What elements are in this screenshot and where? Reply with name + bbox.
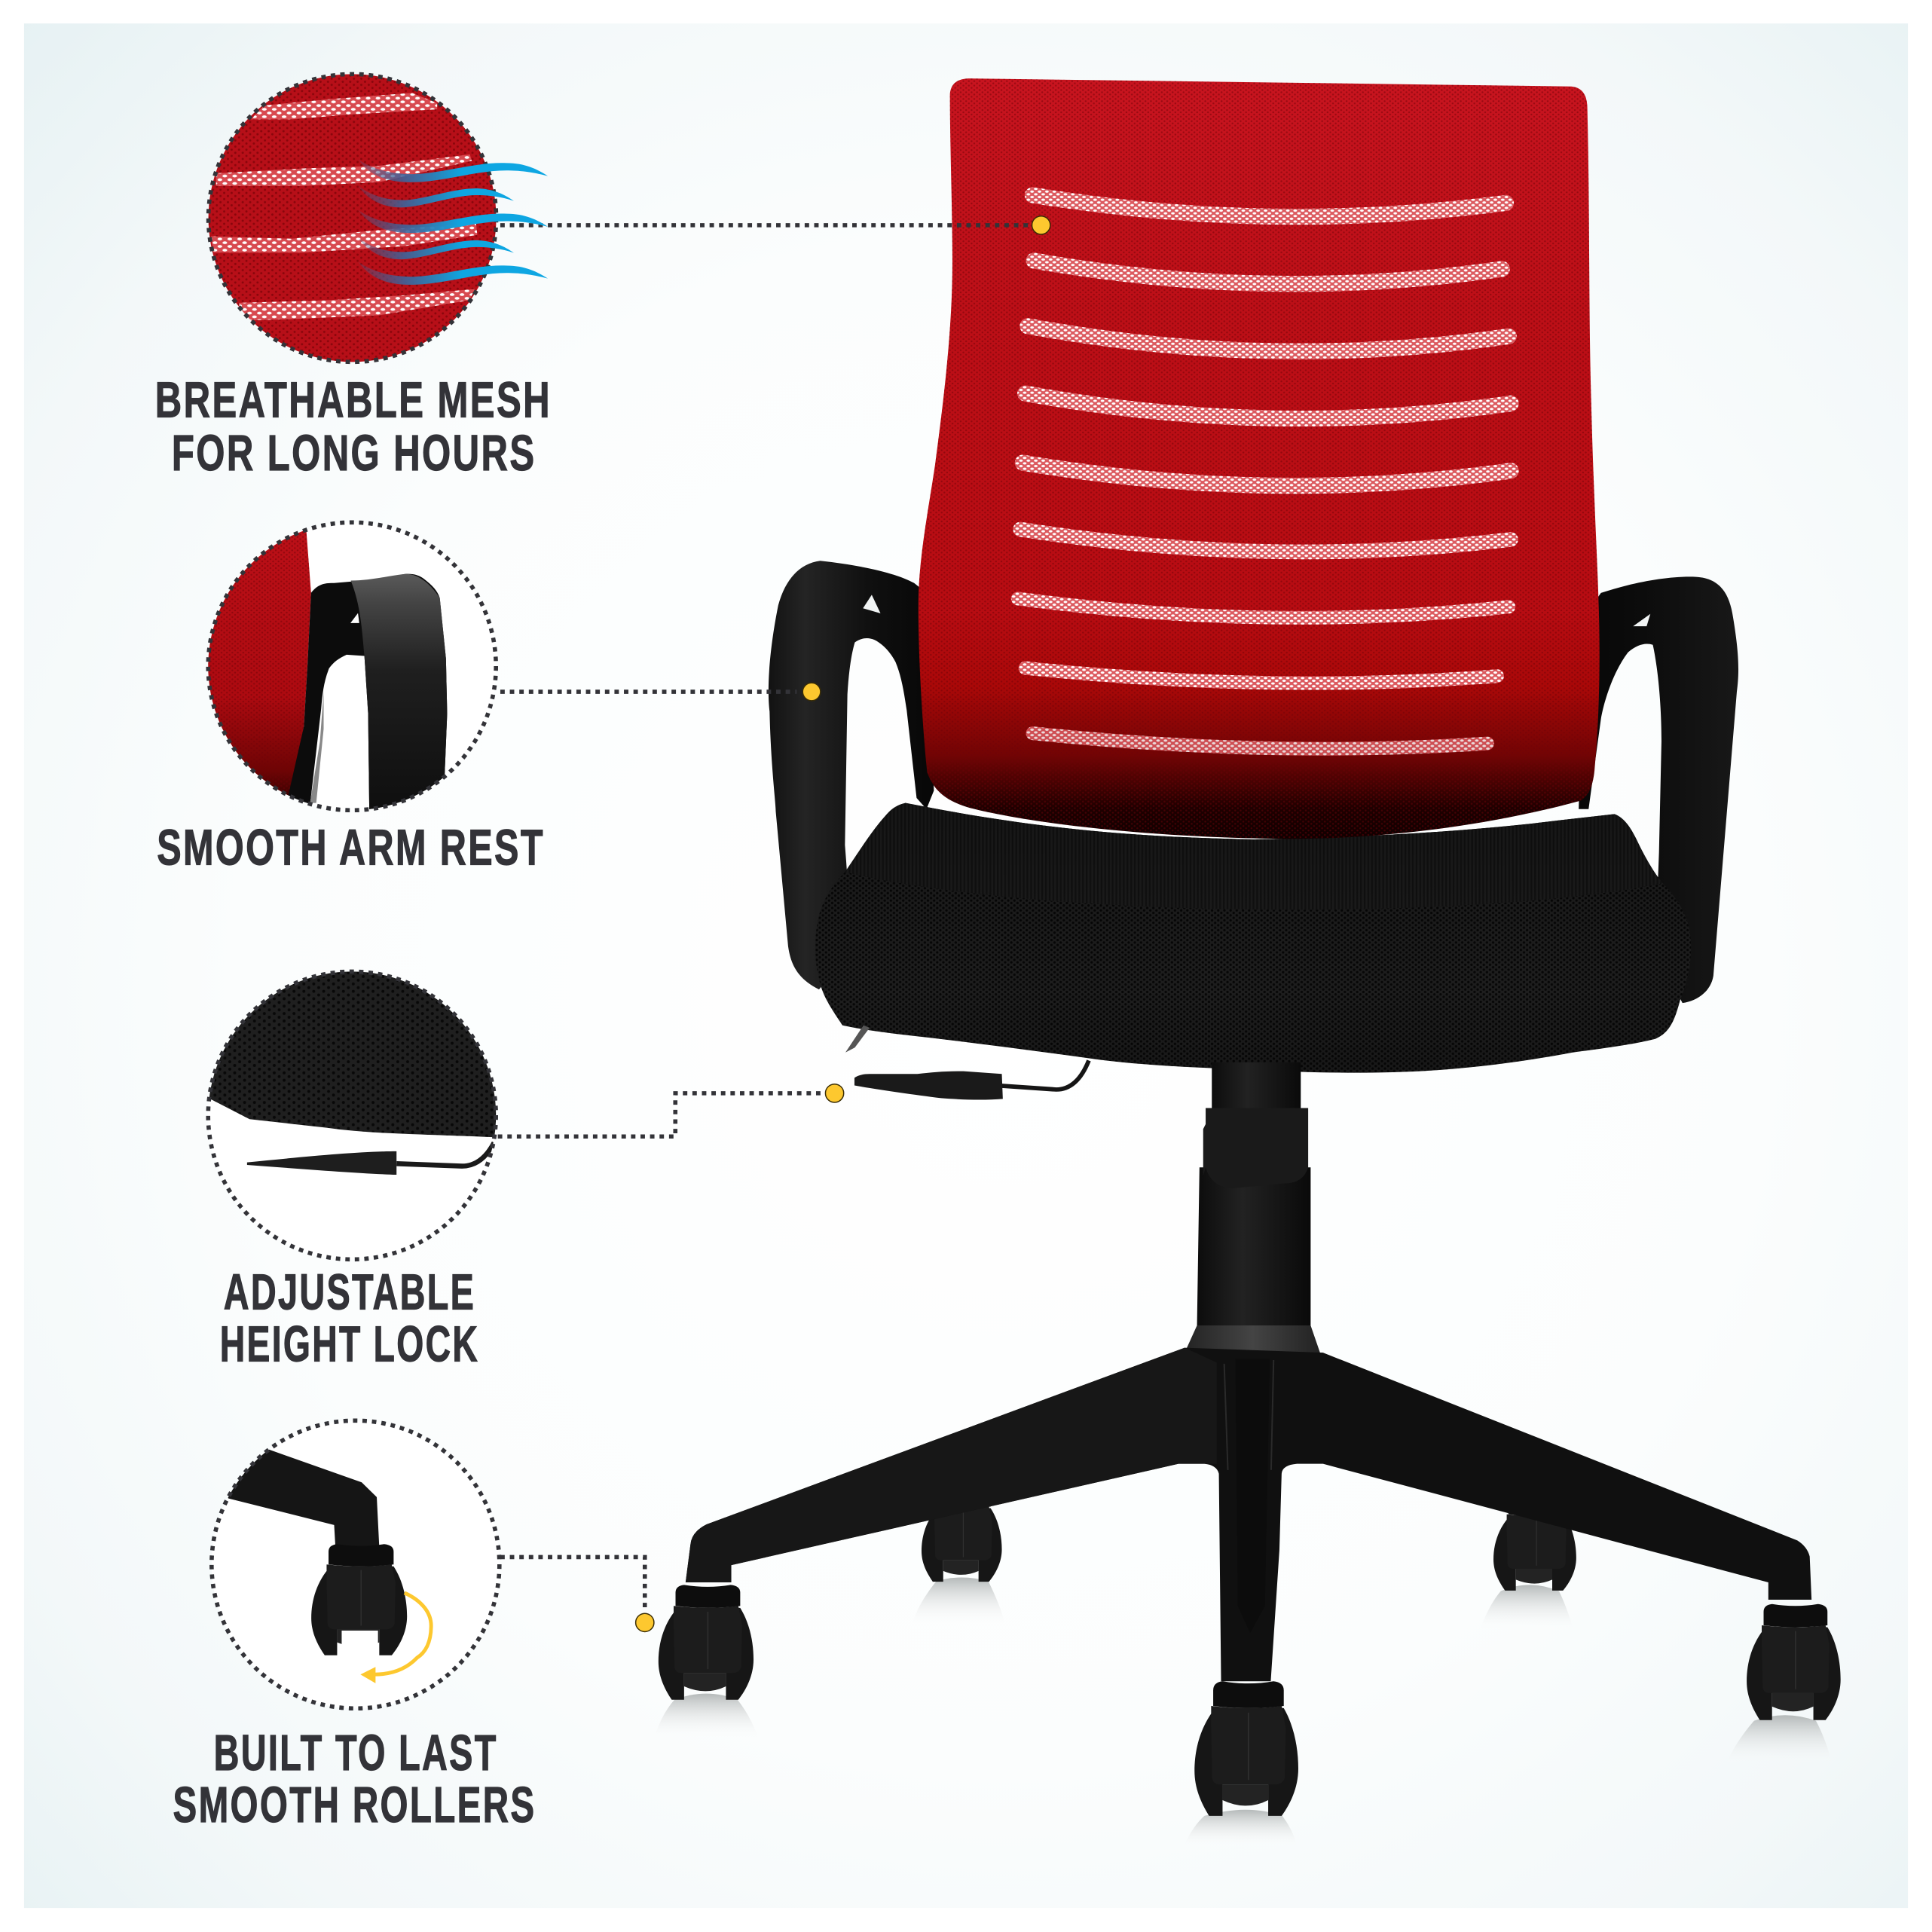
label: smooth arm rest: SMOOTH ARM REST (157, 821, 545, 876)
connector lines (498, 225, 1033, 1612)
label: built to last smooth rollers: BUILT TO LAST (214, 1726, 498, 1781)
feature: breathable mesh (155, 74, 552, 481)
icon: air flow waves (358, 159, 548, 285)
feature: adjustable height lock (197, 964, 506, 1373)
feature: smooth rollers (173, 1420, 536, 1833)
icon: lever close-up circle (197, 964, 506, 1259)
chair product image (659, 78, 1841, 1816)
label: breathable mesh: FOR LONG HOURS (172, 426, 536, 481)
icon: caster close-up circle (212, 1420, 500, 1708)
icon: mesh close-up circle (209, 74, 497, 362)
icon: arm rest close-up circle (197, 519, 496, 815)
caster floor reflections (653, 1577, 1832, 1847)
label: built to last smooth rollers (173, 1726, 536, 1833)
seat cushion (815, 803, 1691, 1073)
label: adjustable height lock: HEIGHT LOCK (220, 1317, 479, 1373)
label: adjustable height lock: ADJUSTABLE (224, 1265, 475, 1321)
label: breathable mesh: BREATHABLE MESH (155, 372, 552, 428)
backrest ventilation stripes (1018, 195, 1511, 749)
rear casters (922, 1490, 1576, 1591)
mesh backrest (919, 78, 1600, 839)
left arm rest (769, 561, 934, 989)
feature: smooth arm rest (157, 519, 545, 876)
icon: rotation arrow (360, 1593, 431, 1683)
label: breathable mesh (155, 372, 552, 481)
five-star base (686, 1348, 1811, 1681)
label: adjustable height lock (220, 1265, 479, 1373)
gas lift column (1185, 1062, 1320, 1353)
callout dots (636, 216, 1050, 1631)
height adjustment lever (854, 1060, 1089, 1100)
right arm rest (1579, 576, 1738, 1003)
front casters (659, 1585, 1841, 1816)
label: built to last smooth rollers: SMOOTH ROLLERS (173, 1778, 536, 1833)
